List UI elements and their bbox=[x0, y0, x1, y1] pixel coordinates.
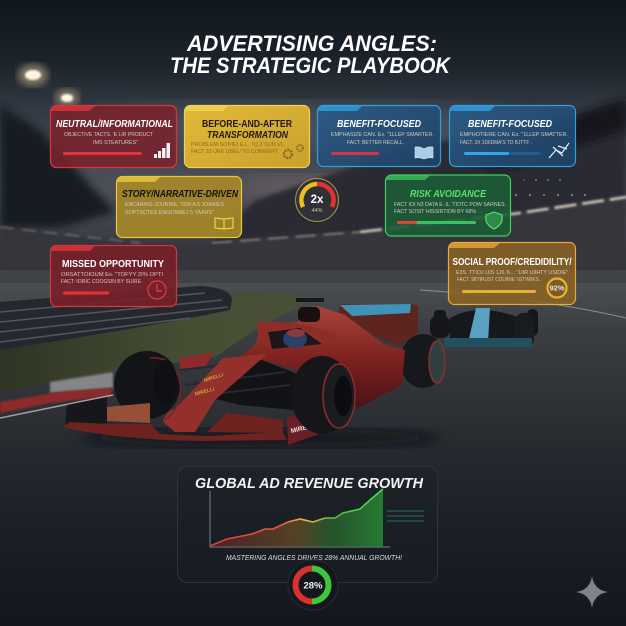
panel: benefit-focused two: EMPHOTIERE CAN. Ex. "1LLEP SMATTER. bbox=[460, 132, 568, 138]
caption: MASTERING ANGLES DRIVES 28% ANNUAL GROWTH! bbox=[226, 555, 402, 562]
icon: bar chart bbox=[154, 143, 170, 158]
gauge: 2x: 2x bbox=[311, 194, 324, 206]
donut: 28%: 28% bbox=[303, 580, 323, 592]
icon: gears bbox=[284, 145, 303, 158]
front right wheel bbox=[291, 356, 353, 434]
panel: neutral/informational bbox=[50, 106, 176, 168]
main red race car bbox=[62, 298, 446, 447]
panel: missed opportunity bbox=[50, 246, 176, 306]
panel: missed opportunity: ORSATTOIOUM Es. "TOFYY 2I% OPTI bbox=[61, 272, 163, 278]
black suspension area bbox=[200, 360, 300, 410]
panel: risk avoidance bbox=[386, 175, 510, 236]
panel: global ad revenue growth bbox=[178, 466, 438, 582]
rear wheel bbox=[400, 334, 446, 388]
panel: benefit-focused one: EMPHASIZE CAN. Ex. "1LLEP SMARTER. bbox=[331, 132, 434, 138]
icon: open book bbox=[415, 147, 433, 159]
panel: before-and-after transformation: TRANSFORMATION bbox=[207, 129, 288, 141]
panel: missed opportunity: FACT: IORIC COOGSIN BY SUIRE bbox=[61, 279, 141, 285]
gauge: 2x: 44% bbox=[311, 208, 323, 214]
main red race car: MIRELLI bbox=[290, 422, 317, 435]
icon: shield bbox=[486, 212, 502, 229]
title: ADVERTISING ANGLES: bbox=[186, 31, 437, 56]
panel: benefit-focused two bbox=[450, 106, 576, 166]
nose bbox=[163, 354, 267, 432]
donut: 28% bbox=[288, 560, 338, 610]
line chart bbox=[210, 489, 424, 547]
panel: story/narrative-driven: ENCARING JOURNIE. "I0W A 5 JOANIES bbox=[125, 202, 224, 208]
panel: social proof/credibility: SOCIAL PROOF/CREDIDILITY/ bbox=[452, 256, 572, 268]
panel: social proof/credibility bbox=[448, 242, 576, 304]
icon: sparkle star bbox=[576, 576, 608, 608]
panel: before-and-after transformation: FACT 33 URE UBEL/ TO CONWERT bbox=[191, 149, 279, 155]
panel: missed opportunity: MISSED OPPORTUNITY bbox=[62, 258, 164, 270]
title: THE STRATEGIC PLAYBOOK bbox=[170, 53, 452, 78]
panel: story/narrative-driven bbox=[116, 176, 242, 238]
title bbox=[170, 31, 452, 78]
panel: risk avoidance: RISK AVOIDANCE bbox=[410, 188, 487, 200]
panel: social proof/credibility: E3S. TTIOJ IJIS 1J6.'K... "1IIR UIIHTY USIDIE" bbox=[456, 270, 568, 276]
main red race car: MIRELLI bbox=[194, 386, 216, 398]
panel: benefit-focused one: BENEFIT-FOCUSED bbox=[337, 118, 421, 130]
panel: before-and-after transformation bbox=[184, 106, 310, 168]
heading: GLOBAL AD REVENUE GROWTH bbox=[195, 476, 424, 492]
panel: story/narrative-driven: SOPTSCTES ENGONNEJ 5 YAARS" bbox=[125, 210, 214, 216]
icon: sketch figure bbox=[549, 143, 569, 158]
front wing bbox=[65, 397, 107, 428]
main red race car: MIRELLI bbox=[203, 372, 225, 384]
panel: neutral/informational: IMS STEATURES" bbox=[93, 140, 138, 146]
panel: benefit-focused two: BENEFIT-FOCUSED bbox=[468, 118, 552, 130]
second race car bbox=[430, 296, 538, 347]
panel: benefit-focused one bbox=[318, 106, 440, 166]
gauge: 2x bbox=[296, 178, 338, 222]
rear wing bbox=[336, 304, 418, 346]
icon: open book bbox=[215, 218, 233, 229]
panel: risk avoidance: FACT IOI N3 DATA E .6, 'TIOTC POW SARNES. bbox=[394, 202, 506, 208]
engine cover and sidepod bbox=[232, 306, 405, 408]
panel: neutral/informational: OBJECTIVE TACTS. 'E LIR PRODUCT bbox=[64, 132, 154, 138]
airbox and halo bbox=[298, 307, 320, 322]
panel: story/narrative-driven: STORY/NARRATIVE-DRIVEN bbox=[122, 188, 238, 200]
panel: benefit-focused two: FACT. 3X 1DIIDMA'S TO BJTTF . bbox=[460, 140, 532, 146]
panel: risk avoidance: FACT SOSIT HISSIRTION BY 68% bbox=[394, 209, 476, 215]
panel: before-and-after transformation: PROBLEM SONIEI E.L. 'IQ.2 SUN VL bbox=[191, 142, 284, 148]
panel: benefit-focused one: FACT: BETTER RECALL. bbox=[347, 140, 404, 146]
icon: clock bbox=[148, 281, 166, 299]
panel: before-and-after transformation: BEFORE-AND-AFTER bbox=[202, 118, 292, 130]
front left wheel bbox=[114, 351, 180, 419]
badge: 92 percent: 92% bbox=[549, 284, 565, 292]
panel: social proof/credibility: FACT. 98'I'IRUST COUIINE 'IGTWIIKS. bbox=[457, 277, 540, 283]
panel: neutral/informational: NEUTRAL/INFORMATIONAL bbox=[56, 118, 173, 130]
